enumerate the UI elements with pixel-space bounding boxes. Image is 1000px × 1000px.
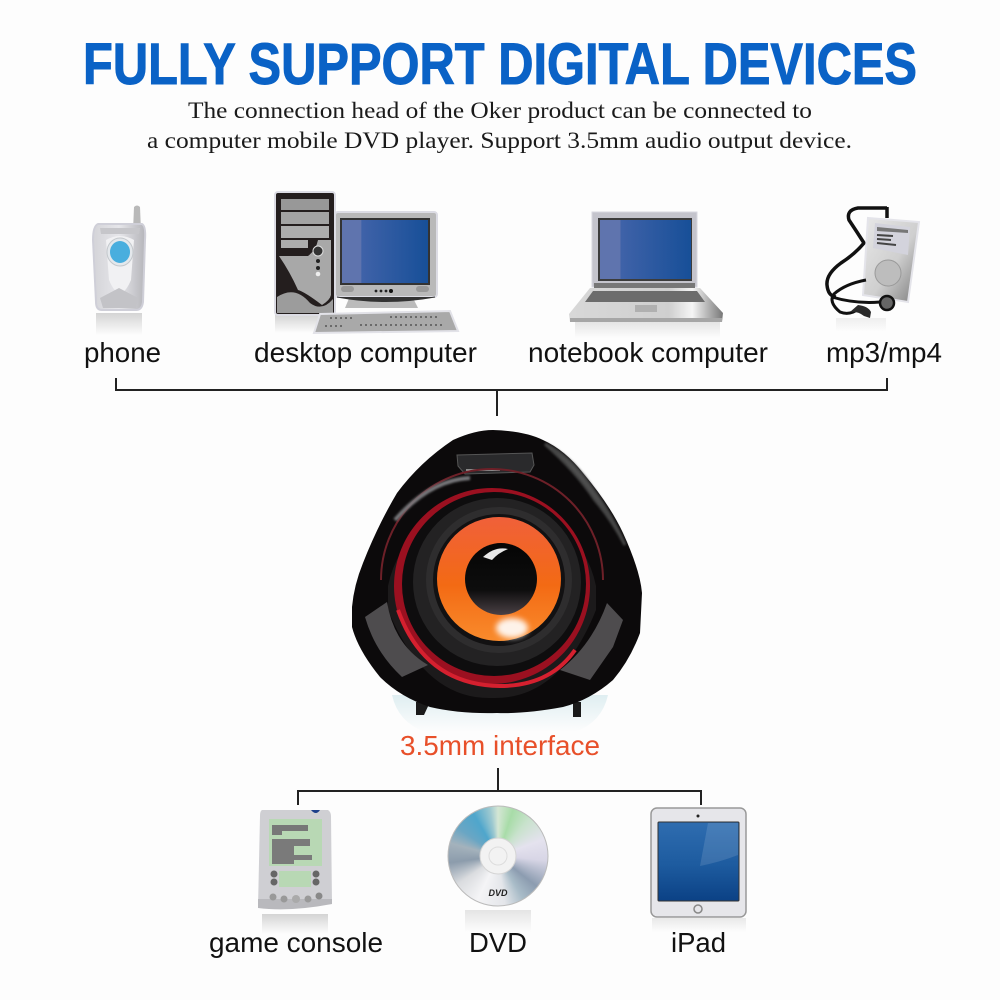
icon: DVD xyxy=(448,806,548,932)
subtitle: a computer mobile DVD player. Support 3.5mm audio output device. xyxy=(147,128,852,153)
label: 3.5mm interface: 3.5mm interface xyxy=(400,730,600,761)
gray highlight xyxy=(545,444,625,545)
top connector xyxy=(116,378,887,416)
dust cap xyxy=(465,543,537,615)
icon: notebook computer xyxy=(569,212,723,338)
red ring xyxy=(394,488,590,684)
icon: phone xyxy=(93,206,145,335)
speaker xyxy=(352,430,642,732)
label: notebook computer: notebook computer xyxy=(528,337,768,368)
tower xyxy=(275,192,335,315)
surround xyxy=(413,498,581,666)
monitor xyxy=(335,212,437,308)
feet and shadow xyxy=(392,695,608,732)
label: phone: phone xyxy=(84,337,161,368)
subtitle: The connection head of the Oker product can be connected to xyxy=(188,98,812,123)
orange cone xyxy=(437,517,561,641)
icon: iPad xyxy=(651,808,746,932)
side panels xyxy=(365,602,428,677)
keyboard xyxy=(314,311,458,333)
top handle xyxy=(457,453,534,474)
icon: DVD: DVD xyxy=(488,888,508,898)
subtitle xyxy=(147,98,852,153)
body xyxy=(352,430,642,713)
label: desktop computer: desktop computer xyxy=(254,337,477,368)
gloss rim xyxy=(388,500,596,698)
bottom connector xyxy=(298,768,701,805)
label: game console: game console xyxy=(209,927,383,958)
icon: desktop computer xyxy=(275,192,458,333)
highlight xyxy=(496,618,528,638)
label: mp3/mp4: mp3/mp4 xyxy=(826,337,942,368)
icon: mp3 player xyxy=(827,207,919,332)
label: DVD: DVD xyxy=(469,927,527,958)
label: iPad: iPad xyxy=(671,927,726,958)
icon: game console xyxy=(258,810,332,934)
